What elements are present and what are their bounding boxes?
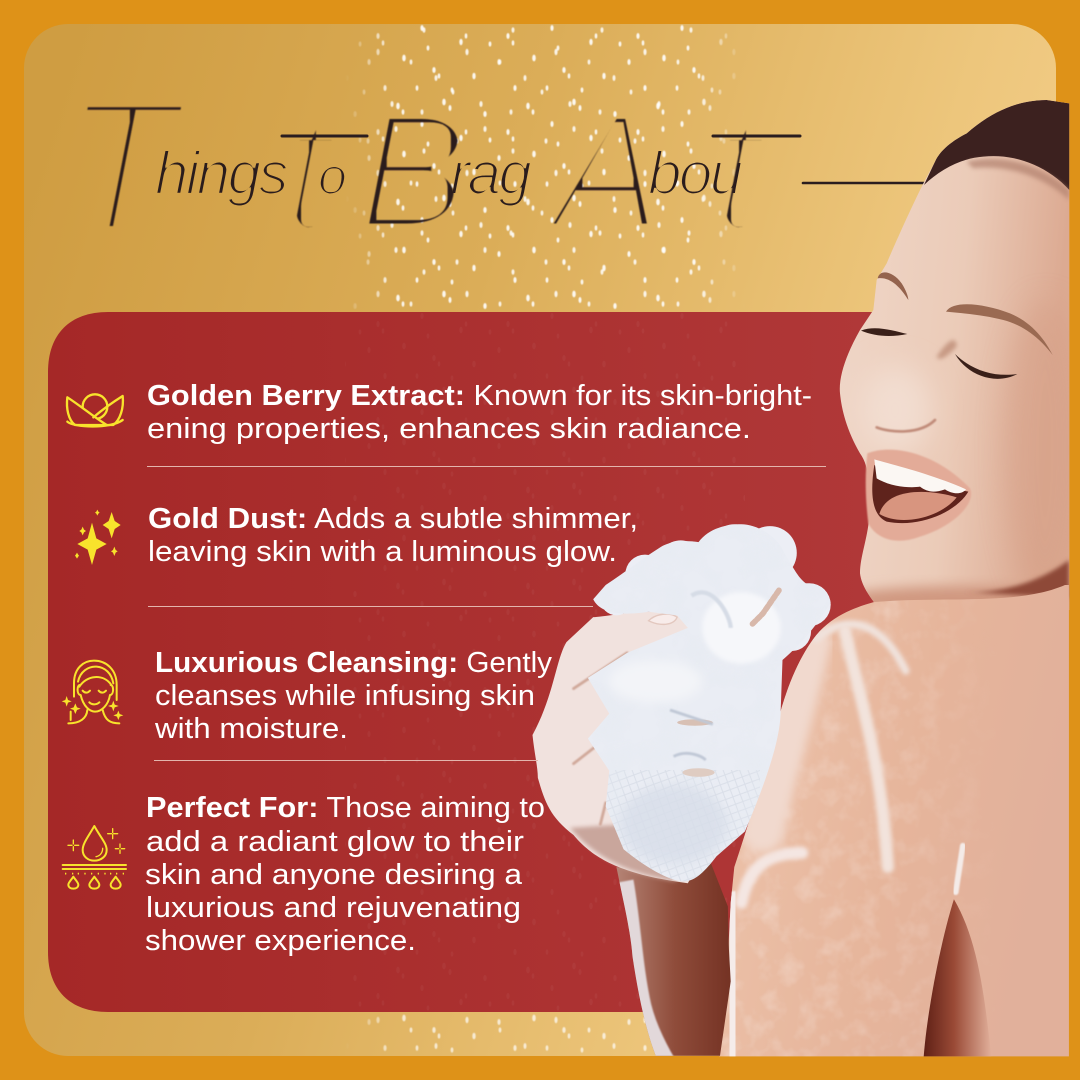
benefit 4: perfect for: add a radiant glow to their — [146, 826, 524, 858]
hand — [532, 611, 734, 883]
forearm — [616, 864, 731, 1056]
title: B — [358, 79, 468, 263]
title: t — [282, 66, 340, 272]
icon: sparkles — [75, 510, 121, 565]
icon: lotus — [67, 394, 123, 426]
icon: droplet on skin layers — [63, 826, 126, 889]
nose — [877, 420, 935, 431]
soap streaks — [731, 903, 734, 1067]
benefit 4: perfect for: skin and anyone desiring a — [145, 859, 523, 891]
benefit 4: perfect for: luxurious and rejuvenating — [146, 892, 521, 924]
benefit 2: gold dust: leaving skin with a luminous glow. — [148, 536, 617, 568]
title: o — [318, 148, 347, 206]
title: A — [543, 79, 662, 263]
benefit 1: golden berry extract: ening properties, enhances skin radiance. — [147, 413, 751, 445]
eye left — [861, 328, 907, 336]
person with loofah — [532, 95, 1080, 1067]
title: t — [712, 66, 770, 272]
benefit 2: gold dust: Gold Dust: Adds a subtle shimmer, — [148, 503, 638, 535]
lips — [866, 450, 971, 541]
benefit 4: perfect for: Perfect For: Those aiming to — [146, 792, 545, 824]
title: T — [62, 61, 190, 273]
benefit 1: golden berry extract: Golden Berry Extract: Known for its skin-bright- — [147, 380, 812, 412]
eyebrow left — [878, 272, 908, 300]
benefit 4: perfect for: shower experience. — [145, 925, 416, 957]
benefit 3: luxurious cleansing — [62, 647, 553, 745]
loofah sponge — [588, 524, 831, 882]
mouth — [872, 465, 968, 523]
icon: woman's face with sparkles — [62, 661, 123, 723]
head and face — [830, 95, 1080, 615]
eyebrow right — [946, 304, 1053, 355]
title: bou — [648, 140, 743, 207]
benefit 4: perfect for — [63, 792, 545, 957]
title: hings — [155, 140, 287, 207]
title flourish strokes — [282, 136, 926, 183]
hair — [924, 100, 1069, 190]
benefit 3: luxurious cleansing: Luxurious Cleansing: Gently — [155, 647, 553, 679]
benefit 3: luxurious cleansing: cleanses while infusing skin — [155, 680, 535, 712]
title: rag — [450, 140, 531, 207]
benefit 3: luxurious cleansing: with moisture. — [154, 713, 348, 745]
panel: red ingredients panel — [48, 312, 880, 1012]
eye right — [955, 354, 1017, 379]
arm-to-body gap — [924, 899, 991, 1058]
back and shoulder — [700, 585, 1075, 1067]
water spray droplets — [345, 24, 745, 1056]
benefit 1: golden berry extract — [67, 380, 812, 445]
benefit 2: gold dust — [75, 503, 638, 568]
title — [62, 61, 926, 273]
